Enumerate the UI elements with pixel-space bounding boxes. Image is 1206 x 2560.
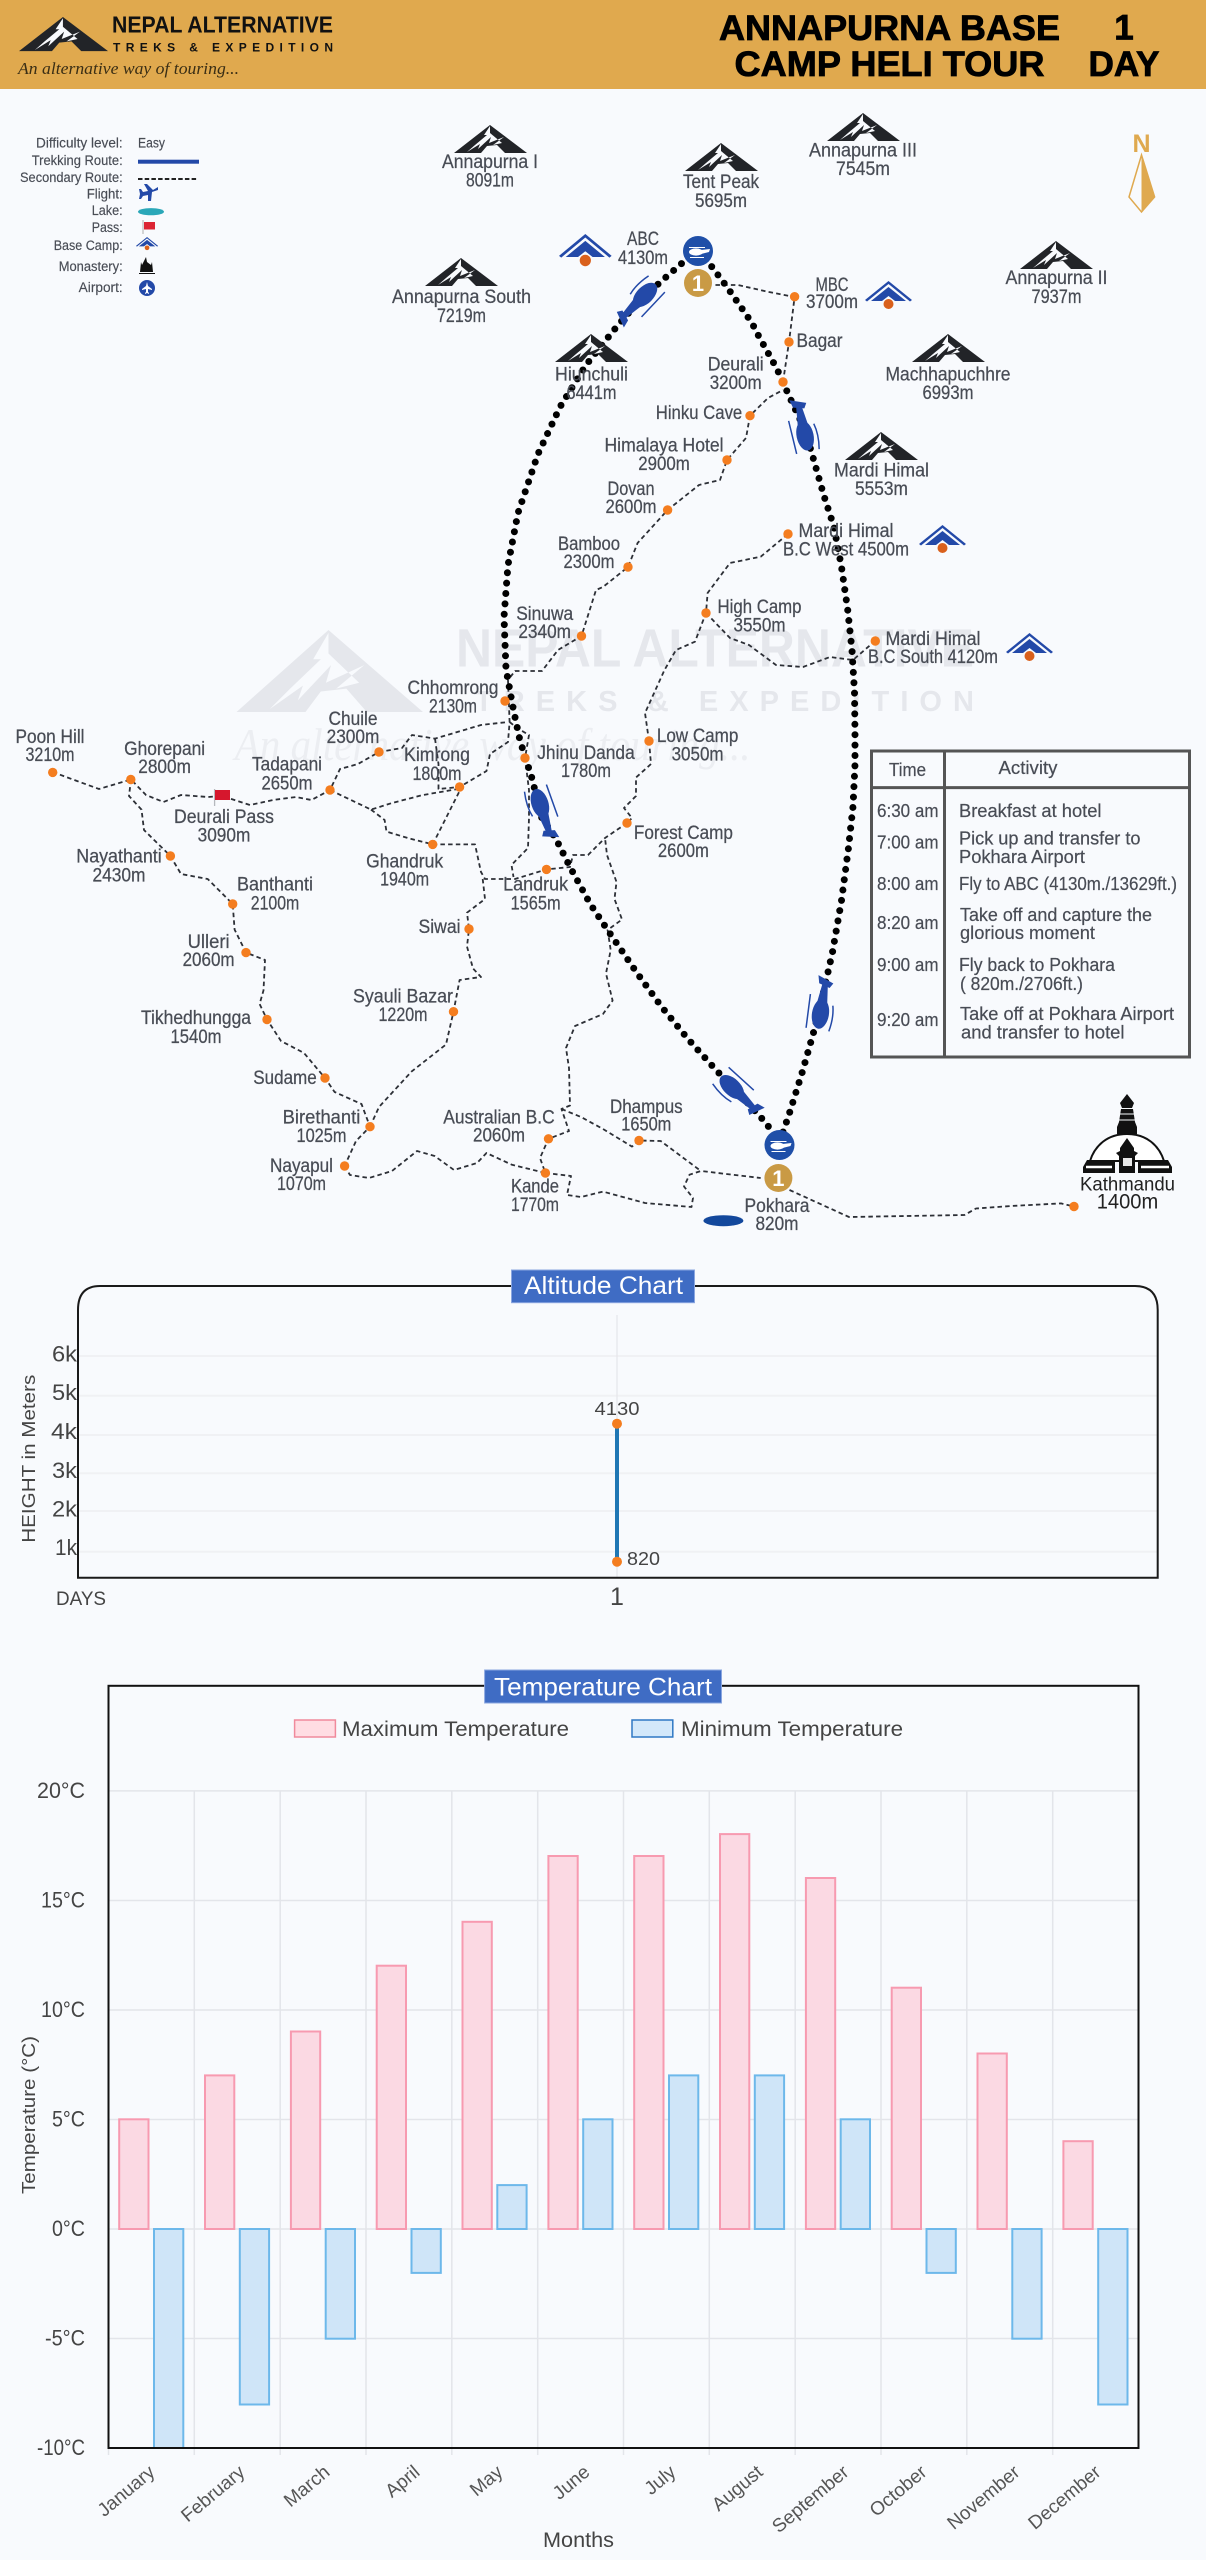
- waypoint: Bagar: Bagar: [796, 331, 843, 352]
- waypoint: Mardi Himal B.C South: B.C South 4120m: [868, 647, 998, 668]
- altitude y ticks: 1k: [55, 1535, 78, 1560]
- waypoint: Tadapani: Tadapani: [252, 755, 322, 776]
- legend: Difficulty level:: [36, 136, 123, 151]
- temperature y ticks: -10°C: [37, 2435, 85, 2460]
- panel: itinerary table: 9:00 am: [877, 955, 938, 975]
- waypoint: Low Camp: [644, 726, 738, 766]
- waypoint: Dovan: 2600m: [606, 497, 656, 518]
- altitude frame: [78, 1286, 1158, 1578]
- waypoint: Deurali Pass: [174, 789, 274, 847]
- icon: Kathmandu stupa: [1083, 1094, 1172, 1173]
- panel: itinerary table: Take off and capture the: [960, 905, 1152, 925]
- waypoint: Low Camp: 3050m: [672, 745, 724, 766]
- temperature month labels: December: [1025, 2461, 1106, 2534]
- panel: itinerary table: 6:30 am: [877, 801, 938, 821]
- waypoint: Hinku Cave: Hinku Cave: [656, 403, 742, 424]
- panel: itinerary table: [872, 751, 1190, 1057]
- waypoint: Pokhara with lake: Pokhara: [744, 1196, 810, 1217]
- peak: Annapurna II: 7937m: [1032, 287, 1082, 308]
- watermark: [232, 619, 974, 770]
- icon: base camp MBC: [865, 281, 912, 309]
- waypoint: Chhomrong: Chhomrong: [408, 678, 498, 699]
- icon: helicopter 1: [609, 275, 666, 331]
- icon: base camp Mardi South: [1006, 633, 1053, 661]
- waypoint: Deurali: 3200m: [710, 373, 762, 394]
- flight route west: [504, 251, 780, 1143]
- icon: helicopter 3: [523, 784, 564, 843]
- waypoint: Chuile: [327, 709, 384, 757]
- secondary trekking routes: [53, 285, 1074, 1217]
- waypoint: Kande: 1770m: [511, 1195, 559, 1216]
- altitude y ticks: 2k: [52, 1497, 78, 1522]
- legend: Secondary Route:: [20, 170, 123, 185]
- altitude line: 820: [627, 1549, 660, 1569]
- waypoint: Tikhedhungga: 1540m: [170, 1027, 222, 1048]
- temperature frame: [108, 1686, 1138, 2448]
- panel: itinerary table: and transfer to hotel: [961, 1022, 1124, 1042]
- waypoint: Ghorepani: 2800m: [138, 757, 191, 778]
- temperature month labels: January: [94, 2461, 160, 2521]
- altitude line: [594, 1399, 660, 1569]
- altitude x labels: 1: [610, 1583, 624, 1611]
- waypoint: High Camp: 3550m: [734, 616, 786, 637]
- waypoint: Banthanti: 2100m: [251, 893, 299, 914]
- icon: base camp Mardi West: [919, 525, 966, 553]
- waypoint: Poon Hill: Poon Hill: [16, 727, 84, 748]
- waypoint: Dhampus: [610, 1097, 683, 1145]
- waypoint: Nayathanti: Nayathanti: [76, 847, 162, 868]
- temperature month labels: [94, 2461, 1106, 2538]
- waypoint: Chuile: Chuile: [328, 709, 378, 730]
- waypoint: High Camp: [701, 597, 802, 637]
- waypoint: Landruk: Landruk: [503, 875, 569, 896]
- waypoint: Mardi Himal B.C West: B.C West 4500m: [783, 540, 909, 561]
- waypoint: Landruk: [503, 865, 569, 914]
- peak: Annapurna I: Annapurna I: [442, 152, 538, 173]
- peak: Annapurna III: 7545m: [836, 159, 890, 180]
- altitude y ticks: 5k: [52, 1380, 78, 1405]
- waypoint: Low Camp: Low Camp: [657, 726, 738, 747]
- waypoint: Sinuwa: 2340m: [518, 622, 571, 643]
- waypoint: Chhomrong: 2130m: [429, 697, 477, 718]
- temperature y ticks: 10°C: [41, 1997, 85, 2022]
- peak: Annapurna III: [809, 113, 917, 180]
- panel: itinerary table: Take off at Pokhara Airport: [960, 1004, 1174, 1024]
- panel: itinerary table: Breakfast at hotel: [959, 801, 1102, 821]
- panel: itinerary table: Pick up and transfer to: [959, 828, 1140, 848]
- altitude y ticks: 6k: [52, 1342, 78, 1367]
- icon: helipad ABC: [683, 236, 713, 266]
- icon: flight: [139, 184, 158, 201]
- header banner: [0, 0, 1206, 89]
- waypoint: Kimrong: 1800m: [412, 764, 462, 785]
- temperature legend: Maximum Temperature: [342, 1718, 569, 1741]
- icon: day 1 badge ABC: [684, 269, 712, 297]
- logo: An alternative way of touring...: [17, 59, 239, 78]
- altitude y ticks: 4k: [51, 1419, 78, 1444]
- temperature grid: [108, 1791, 1138, 2455]
- altitude x labels: DAYS: [56, 1589, 106, 1610]
- icon: day 1 badge Pokhara: [764, 1164, 792, 1192]
- logo: TREKS & EXPEDITION: [113, 41, 333, 55]
- legend: Easy: [138, 136, 165, 151]
- waypoint: High Camp: High Camp: [718, 597, 802, 618]
- peak: Annapurna I: [442, 125, 538, 192]
- peak: Annapurna II: [1006, 241, 1108, 308]
- peak: Machhapuchhre: 6993m: [922, 383, 974, 404]
- icon: pass flag: [143, 220, 155, 234]
- waypoint: Sinuwa: Sinuwa: [516, 604, 574, 625]
- temperature legend: [295, 1718, 903, 1741]
- waypoint: Kathmandu: [1069, 1175, 1175, 1214]
- waypoint: Australian B.C: 2060m: [473, 1126, 525, 1147]
- waypoint: Bamboo: Bamboo: [558, 534, 620, 555]
- waypoint: Himalaya Hotel: Himalaya Hotel: [604, 436, 724, 457]
- peak: Tent Peak: Tent Peak: [683, 172, 759, 193]
- temperature month labels: August: [708, 2461, 768, 2516]
- legend: Base Camp:: [54, 238, 123, 253]
- panel: altitude chart: [19, 1270, 1158, 1611]
- waypoint: Ulleri: [183, 932, 251, 971]
- waypoint: Landruk: 1565m: [511, 893, 561, 914]
- icon: day 1 badge ABC: 1: [692, 271, 704, 296]
- waypoint: Mardi Himal B.C South: Mardi Himal: [886, 629, 980, 650]
- panel: itinerary table: glorious moment: [960, 923, 1095, 943]
- waypoint: ABC label: 4130m: [618, 248, 668, 269]
- waypoint: Dhampus: Dhampus: [610, 1097, 683, 1118]
- waypoint: Himalaya Hotel: 2900m: [638, 454, 690, 475]
- waypoint: Mardi Himal B.C West: [783, 521, 909, 561]
- peak: Machhapuchhre: [886, 334, 1010, 404]
- legend: Pass:: [92, 220, 123, 235]
- altitude y ticks: 3k: [52, 1458, 78, 1483]
- icon: helipad Pokhara: [764, 1130, 794, 1160]
- temperature month labels: November: [944, 2461, 1025, 2534]
- peak: Tent Peak: [683, 143, 759, 212]
- waypoint: Poon Hill: [16, 727, 84, 777]
- waypoint: Nayapul: Nayapul: [270, 1156, 333, 1177]
- temperature month labels: May: [466, 2461, 508, 2501]
- temperature legend: Minimum Temperature: [681, 1718, 903, 1741]
- waypoint: ABC label: [618, 229, 668, 269]
- duration: DAY: [1088, 45, 1160, 84]
- waypoint: Chhomrong: [408, 678, 510, 718]
- panel: itinerary table: Activity: [998, 758, 1058, 778]
- waypoint: Siwai: Siwai: [418, 917, 460, 938]
- waypoint: Bamboo: [558, 534, 633, 573]
- temperature month labels: March: [280, 2462, 334, 2512]
- waypoint: Kande: [511, 1168, 559, 1216]
- altitude line: 4130: [594, 1399, 640, 1419]
- waypoint: Kande: Kande: [511, 1177, 559, 1198]
- waypoint: Pokhara with lake: 820m: [756, 1214, 798, 1235]
- panel: itinerary table: Fly back to Pokhara: [959, 955, 1116, 975]
- flight route east: [698, 251, 855, 1143]
- waypoint: Dovan: Dovan: [608, 479, 654, 500]
- waypoint: Nayathanti: 2430m: [92, 866, 146, 887]
- temperature bars: maximum: [119, 1834, 1093, 2229]
- temperature y ticks: [37, 1778, 85, 2460]
- waypoint: Sinuwa: [516, 604, 586, 643]
- waypoint: Syauli Bazar: [353, 986, 458, 1026]
- panel: itinerary table: 8:00 am: [877, 874, 938, 894]
- icon: helicopter 4: [805, 974, 839, 1032]
- panel: itinerary table: Fly to ABC (4130m./13629ft.): [959, 874, 1177, 894]
- peak: Annapurna South: Annapurna South: [392, 287, 531, 308]
- peak: Hiunchuli: 6441m: [566, 383, 616, 404]
- panel: itinerary table: Time: [889, 760, 926, 780]
- peak: Hiunchuli: Hiunchuli: [555, 365, 628, 386]
- waypoint: Ulleri: Ulleri: [188, 932, 230, 953]
- peak: Mardi Himal: [834, 432, 929, 500]
- waypoint: Dhampus: 1650m: [621, 1115, 671, 1136]
- compass north arrow: N: [1132, 130, 1151, 158]
- waypoint: Australian B.C: Australian B.C: [443, 1107, 555, 1128]
- waypoint: Forest Camp: 2600m: [658, 841, 709, 862]
- icon: day 1 badge Pokhara: 1: [772, 1166, 785, 1191]
- temperature y title: Temperature (°C): [19, 2036, 39, 2194]
- waypoint: Deurali: Deurali: [708, 355, 764, 376]
- peak: Annapurna I: 8091m: [466, 171, 514, 192]
- legend: Trekking Route:: [32, 153, 123, 168]
- waypoint: Forest Camp: Forest Camp: [634, 823, 733, 844]
- title: CAMP HELI TOUR: [734, 45, 1044, 84]
- temperature y ticks: 15°C: [41, 1888, 85, 1912]
- waypoint: Ghorepani: Ghorepani: [124, 739, 205, 760]
- waypoint: Nayapul: [270, 1156, 349, 1195]
- peak: Tent Peak: 5695m: [695, 191, 747, 212]
- waypoint: Kathmandu: 1400m: [1097, 1190, 1158, 1214]
- watermark: An alternative way of touring...: [232, 719, 751, 770]
- icon: airport: [139, 280, 155, 296]
- icon: lake: [138, 208, 164, 215]
- panel: itinerary table: ( 820m./2706ft.): [960, 974, 1083, 994]
- panel: itinerary table: 9:20 am: [877, 1010, 938, 1030]
- waypoint: Jhinu Danda: 1780m: [561, 761, 611, 782]
- waypoint: MBC: [790, 275, 858, 313]
- waypoint: Ghandruk: [366, 840, 444, 891]
- icon: base camp ABC: [559, 234, 612, 266]
- peak: Annapurna III: Annapurna III: [809, 141, 917, 162]
- waypoint: Nayapul: 1070m: [277, 1174, 326, 1195]
- waypoint: Kimrong: [404, 745, 470, 792]
- waypoint: Deurali Pass: 3090m: [198, 826, 250, 847]
- title: [719, 9, 1060, 84]
- waypoint: Tadapani: [252, 755, 335, 795]
- title: ANNAPURNA BASE: [719, 9, 1060, 48]
- waypoint: Kimrong: Kimrong: [404, 745, 470, 766]
- logo: NEPAL ALTERNATIVE: [112, 12, 333, 38]
- peak: Mardi Himal: 5553m: [855, 479, 908, 500]
- icon: helicopter 5: [712, 1067, 768, 1122]
- legend: [20, 136, 199, 296]
- icon: base camp: [136, 237, 158, 250]
- waypoint: Bamboo: 2300m: [564, 552, 614, 573]
- peak: Annapurna II: Annapurna II: [1006, 268, 1108, 289]
- waypoint: Banthanti: Banthanti: [237, 875, 313, 896]
- temperature y ticks: -5°C: [45, 2326, 85, 2350]
- legend: Flight:: [87, 187, 123, 202]
- temperature y ticks: 20°C: [37, 1778, 85, 1803]
- watermark: TREKS & EXPEDITION: [475, 686, 974, 718]
- waypoint: Jhinu Danda: Jhinu Danda: [537, 743, 635, 764]
- waypoint: Syauli Bazar: 1220m: [378, 1005, 428, 1026]
- temperature y ticks: 0°C: [52, 2216, 85, 2241]
- waypoint: Ghandruk: 1940m: [380, 870, 429, 891]
- waypoint: Sudame: Sudame: [253, 1068, 317, 1089]
- icon: helicopter 2: [784, 396, 821, 454]
- waypoint: Deurali: [708, 355, 788, 394]
- peak: Mardi Himal: Mardi Himal: [834, 461, 929, 482]
- waypoint: Tikhedhungga: Tikhedhungga: [141, 1008, 251, 1029]
- legend: Lake:: [92, 203, 123, 218]
- panel: temperature chart: [19, 1670, 1138, 2552]
- altitude y ticks: [51, 1342, 78, 1560]
- compass north arrow: [1129, 130, 1155, 212]
- waypoint: Poon Hill: 3210m: [26, 745, 74, 766]
- waypoint: Syauli Bazar: Syauli Bazar: [353, 986, 454, 1007]
- temperature month labels: April: [382, 2462, 424, 2502]
- waypoint: Dovan: [606, 479, 672, 518]
- temperature bars: minimum: [154, 2075, 1128, 2448]
- waypoint: Jhinu Danda: [520, 743, 635, 782]
- waypoint: Banthanti: [228, 875, 313, 914]
- waypoint: MBC: MBC: [816, 275, 848, 296]
- waypoint: Ghorepani: [124, 739, 205, 784]
- waypoint: ABC label: ABC: [627, 229, 659, 250]
- waypoint: Birethanti: [283, 1107, 375, 1147]
- peak: Annapurna South: [392, 258, 531, 327]
- temperature y ticks: 5°C: [52, 2106, 85, 2132]
- temperature month labels: October: [866, 2461, 932, 2521]
- waypoint: Australian B.C: [443, 1107, 555, 1147]
- temperature month labels: February: [177, 2461, 250, 2527]
- panel: itinerary table: 8:20 am: [877, 913, 938, 933]
- legend: Airport:: [79, 280, 123, 295]
- waypoint: Deurali Pass: Deurali Pass: [174, 807, 274, 828]
- panel: itinerary table: Pokhara Airport: [959, 847, 1085, 867]
- peak: Machhapuchhre: Machhapuchhre: [886, 365, 1010, 386]
- temperature x title: Months: [543, 2529, 614, 2552]
- logo: [17, 12, 333, 78]
- watermark: NEPAL ALTERNATIVE: [456, 619, 974, 679]
- waypoint: Chuile: 2300m: [327, 727, 379, 748]
- altitude x labels: [56, 1583, 624, 1611]
- waypoint: Kathmandu: Kathmandu: [1080, 1175, 1175, 1196]
- waypoint: Birethanti: 1025m: [296, 1126, 346, 1147]
- temperature month labels: June: [549, 2462, 594, 2504]
- waypoint: Mardi Himal B.C South: [868, 629, 998, 668]
- waypoint: Mardi Himal B.C West: Mardi Himal: [798, 521, 894, 542]
- temperature month labels: September: [769, 2461, 854, 2538]
- legend: Monastery:: [59, 259, 123, 274]
- icon: monastery: [139, 257, 155, 274]
- waypoint: Birethanti: Birethanti: [283, 1107, 360, 1128]
- panel: itinerary table: 7:00 am: [877, 832, 938, 852]
- waypoint: Tikhedhungga: [141, 1008, 272, 1048]
- waypoint: Ghandruk: Ghandruk: [366, 852, 444, 873]
- altitude title: Altitude Chart: [524, 1272, 683, 1300]
- duration: [1088, 8, 1160, 84]
- temperature title: Temperature Chart: [494, 1674, 712, 1702]
- peak: Annapurna South: 7219m: [437, 306, 486, 327]
- peak: Hiunchuli: [555, 334, 628, 404]
- altitude y title: HEIGHT in Meters: [19, 1375, 39, 1543]
- waypoint: Tadapani: 2650m: [262, 773, 312, 794]
- waypoint: MBC: 3700m: [806, 292, 858, 313]
- temperature month labels: July: [641, 2461, 681, 2500]
- waypoint: Forest Camp: [622, 818, 733, 862]
- duration: 1: [1114, 8, 1134, 48]
- waypoint: Ulleri: 2060m: [183, 950, 235, 971]
- waypoint: Nayathanti: [76, 847, 175, 887]
- waypoint: Pokhara with lake: [703, 1196, 810, 1235]
- waypoint: Himalaya Hotel: [604, 436, 732, 475]
